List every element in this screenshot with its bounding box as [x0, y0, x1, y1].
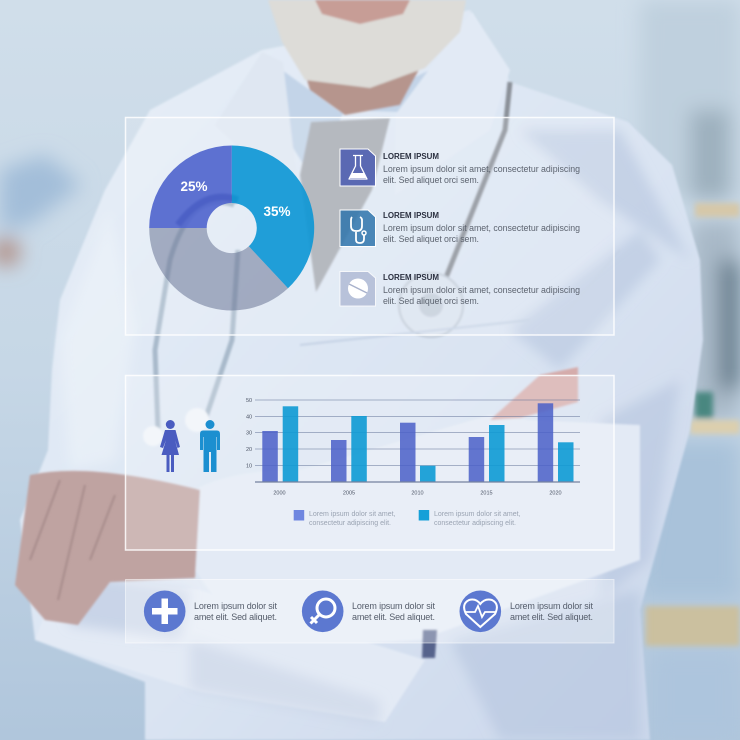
text: item 1: amet elit. Sed aliquet. — [194, 612, 277, 622]
text block 2: elit. Sed aliquet orci sem. — [383, 234, 479, 244]
text block 1: LOREM IPSUM — [383, 152, 439, 161]
bar chart: 2000 — [273, 490, 286, 496]
icon: gender symbol — [302, 590, 344, 632]
legend item 1: consectetur adipiscing elit. — [309, 520, 391, 527]
icon: medical cross — [144, 590, 186, 632]
text block 2: LOREM IPSUM — [383, 211, 439, 220]
bar chart: 2010 — [411, 490, 424, 496]
text block 1: Lorem ipsum dolor sit amet, consectetur adipiscing — [383, 164, 580, 174]
legend item 2: Lorem ipsum dolor sit amet, — [434, 511, 521, 518]
bar chart: 2020 — [549, 490, 562, 496]
bar chart: 30 — [246, 430, 252, 436]
text block 3: elit. Sed aliquet orci sem. — [383, 296, 479, 306]
text: item 1 — [194, 601, 277, 622]
text block 3 — [383, 273, 580, 306]
text: item 3: amet elit. Sed aliquet. — [510, 612, 593, 622]
text block 3: LOREM IPSUM — [383, 273, 439, 282]
panel: top glass card — [126, 118, 614, 335]
legend item 1: Lorem ipsum dolor sit amet, — [309, 511, 396, 518]
icon: female figure — [160, 420, 180, 472]
panel: bottom glass card — [126, 580, 614, 643]
icon: heart with pulse — [460, 590, 501, 632]
icon: male figure — [200, 420, 220, 472]
bar chart: 50 — [246, 398, 252, 404]
text block 3: Lorem ipsum dolor sit amet, consectetur adipiscing — [383, 285, 580, 295]
icon: pill — [340, 272, 376, 306]
legend item 1 — [294, 510, 396, 527]
text: item 2: Lorem ipsum dolor sit — [352, 601, 435, 611]
text: item 3: Lorem ipsum dolor sit — [510, 601, 593, 611]
text: item 2: amet elit. Sed aliquet. — [352, 612, 435, 622]
text: item 2 — [352, 601, 435, 622]
bar chart — [246, 398, 580, 496]
coat fold shading — [60, 130, 690, 740]
text block 1 — [383, 152, 580, 185]
bar chart: 10 — [246, 464, 252, 470]
panel: middle glass card — [126, 376, 614, 550]
legend item 2: consectetur adipiscing elit. — [434, 520, 516, 527]
text block 1: elit. Sed aliquet orci sem. — [383, 175, 479, 185]
text: item 3 — [510, 601, 593, 622]
icon: stethoscope — [340, 210, 376, 246]
text block 2 — [383, 211, 580, 244]
label: 35%: 35% — [263, 204, 291, 219]
label: 25%: 25% — [180, 179, 208, 194]
icon: flask — [340, 149, 376, 186]
text: item 1: Lorem ipsum dolor sit — [194, 601, 277, 611]
bar chart: 2015 — [480, 490, 493, 496]
legend item 2 — [419, 510, 521, 527]
bar chart: 20 — [246, 447, 252, 453]
text block 2: Lorem ipsum dolor sit amet, consectetur adipiscing — [383, 223, 580, 233]
donut chart — [149, 146, 314, 310]
bar chart: 40 — [246, 414, 252, 420]
bar chart: 2005 — [343, 490, 355, 496]
